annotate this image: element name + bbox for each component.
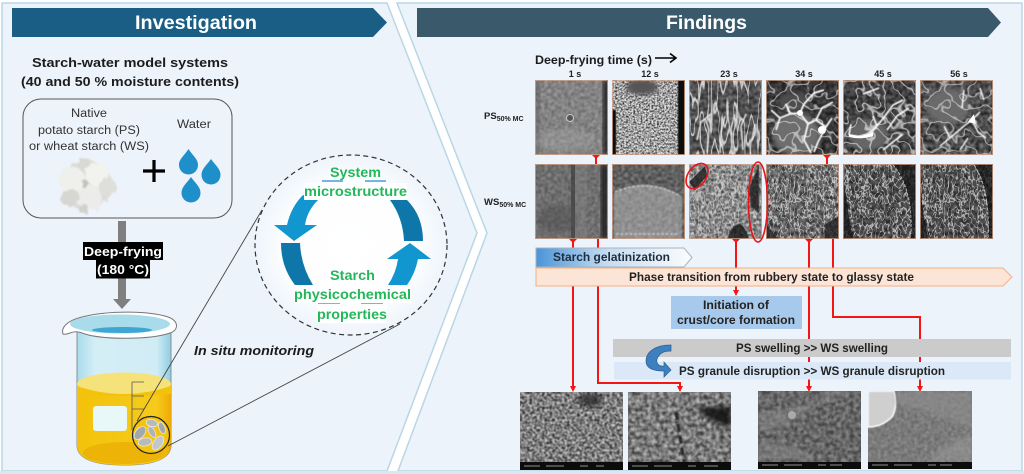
icon: water drops — [179, 149, 220, 202]
label: water: Water — [177, 119, 211, 131]
bottom edge band — [0, 471, 1024, 474]
label: system microstructure — [304, 165, 408, 200]
micrograph: PS 1 s — [535, 80, 608, 155]
axis title: deep-frying time: Deep-frying time (s) — [535, 53, 652, 67]
label: native starch: potato starch (PS) — [38, 125, 140, 137]
banner: findings: Findings — [666, 13, 747, 34]
time labels: 23 s — [720, 69, 738, 79]
cycle diagram — [255, 155, 447, 335]
label: starch physicochemical properties — [294, 268, 411, 323]
zoom line: lower — [168, 324, 400, 446]
label: deep-frying temperature: (180 °C) — [97, 263, 149, 277]
micrograph: WS 1 s — [535, 164, 608, 239]
callout: crust/core formation: crust/core formation — [677, 313, 795, 327]
red connector lines — [573, 155, 920, 389]
cycle arrow: bottom left — [281, 243, 313, 285]
banner: investigation: Investigation — [135, 13, 257, 34]
phase bar: rubbery to glassy: Phase transition from rubbery state to glassy state — [629, 270, 914, 284]
row label: PS: PS — [484, 111, 497, 122]
arrow: deep-frying — [113, 221, 131, 309]
connector arrowheads — [569, 155, 923, 392]
micrograph: PS 12 s — [612, 80, 685, 155]
label: deep-frying temperature — [83, 242, 163, 278]
micrograph: WS 23 s — [689, 164, 762, 239]
micrograph: WS 34 s — [766, 164, 839, 239]
heading: model systems: Starch-water model systems — [32, 56, 228, 70]
zoom line: upper — [137, 210, 262, 421]
beaker label patch — [93, 406, 127, 431]
micrograph: PS 56 s — [920, 80, 993, 155]
micrograph: WS 56 s — [920, 164, 993, 239]
bar: swelling comparison — [613, 339, 1011, 357]
SEM image 4 — [868, 391, 972, 469]
row label: WS: 50% MC — [499, 202, 526, 209]
SEM image 3 — [758, 391, 861, 469]
axis arrow — [655, 54, 676, 62]
phase bar: rubbery to glassy — [536, 268, 1012, 286]
bar: granule disruption comparison: PS granule disruption >> WS granule disruption — [679, 364, 945, 378]
time labels: 45 s — [874, 69, 892, 79]
icon: curved blue arrow — [646, 345, 671, 377]
cycle arc fragments — [318, 181, 386, 303]
label: starch physicochemical properties: physicochemical — [294, 287, 411, 302]
row label: WS: WS — [484, 197, 499, 208]
heading: model systems — [21, 56, 239, 89]
panel background: findings — [397, 3, 1022, 471]
highlight: large red ellipse — [748, 162, 768, 242]
banner: findings — [417, 8, 1001, 37]
label: system microstructure: System — [330, 165, 381, 180]
panel background: investigation — [2, 3, 477, 471]
micrograph: PS 45 s — [843, 80, 916, 155]
icon: starch powder — [59, 158, 116, 214]
micrograph: PS 23 s — [689, 80, 762, 155]
highlight: small red ellipse — [682, 159, 712, 193]
magnified granules inset — [132, 416, 170, 454]
micrograph: WS 45 s — [843, 164, 916, 239]
cycle arrow: bottom right — [387, 243, 431, 285]
time labels: 56 s — [950, 69, 968, 79]
time labels — [569, 69, 968, 79]
micrograph: WS 12 s — [612, 164, 685, 239]
panel: investigation — [2, 3, 477, 471]
cycle arrow: top right — [390, 200, 423, 241]
dashed circle — [255, 155, 447, 335]
time labels: 12 s — [641, 69, 659, 79]
ingredients box — [23, 99, 232, 218]
label: starch physicochemical properties: Starch — [330, 268, 375, 283]
label: native starch: or wheat starch (WS) — [29, 141, 149, 153]
label: starch physicochemical properties: properties — [317, 307, 387, 322]
phase bar: starch gelatinization — [536, 248, 692, 267]
callout: crust/core formation — [671, 296, 802, 329]
beaker scale — [132, 382, 144, 430]
label: system microstructure: microstructure — [304, 184, 408, 199]
heading: model systems: (40 and 50 % moisture contents) — [21, 75, 239, 89]
cycle arrow: top left — [274, 195, 318, 241]
SEM image 1 — [520, 392, 623, 470]
row label: PS: 50% MC — [497, 116, 524, 123]
SEM image 2 — [628, 392, 731, 470]
label: in situ monitoring: In situ monitoring — [194, 344, 314, 358]
phase bar: starch gelatinization: Starch gelatinization — [553, 250, 670, 264]
callout: crust/core formation: Initiation of — [703, 298, 770, 312]
icon: beaker with frying oil — [63, 312, 177, 465]
bar: swelling comparison: PS swelling >> WS swelling — [736, 341, 888, 355]
time labels: 34 s — [795, 69, 813, 79]
icon: plus — [143, 160, 165, 182]
time labels: 1 s — [569, 69, 581, 79]
micrograph: PS 34 s — [766, 80, 839, 155]
label: native starch — [29, 108, 149, 153]
panel: findings — [397, 3, 1022, 471]
label: deep-frying temperature: Deep-frying — [84, 245, 162, 259]
bar: granule disruption comparison — [614, 362, 1011, 380]
banner: investigation — [12, 8, 387, 37]
label: native starch: Native — [71, 108, 107, 120]
